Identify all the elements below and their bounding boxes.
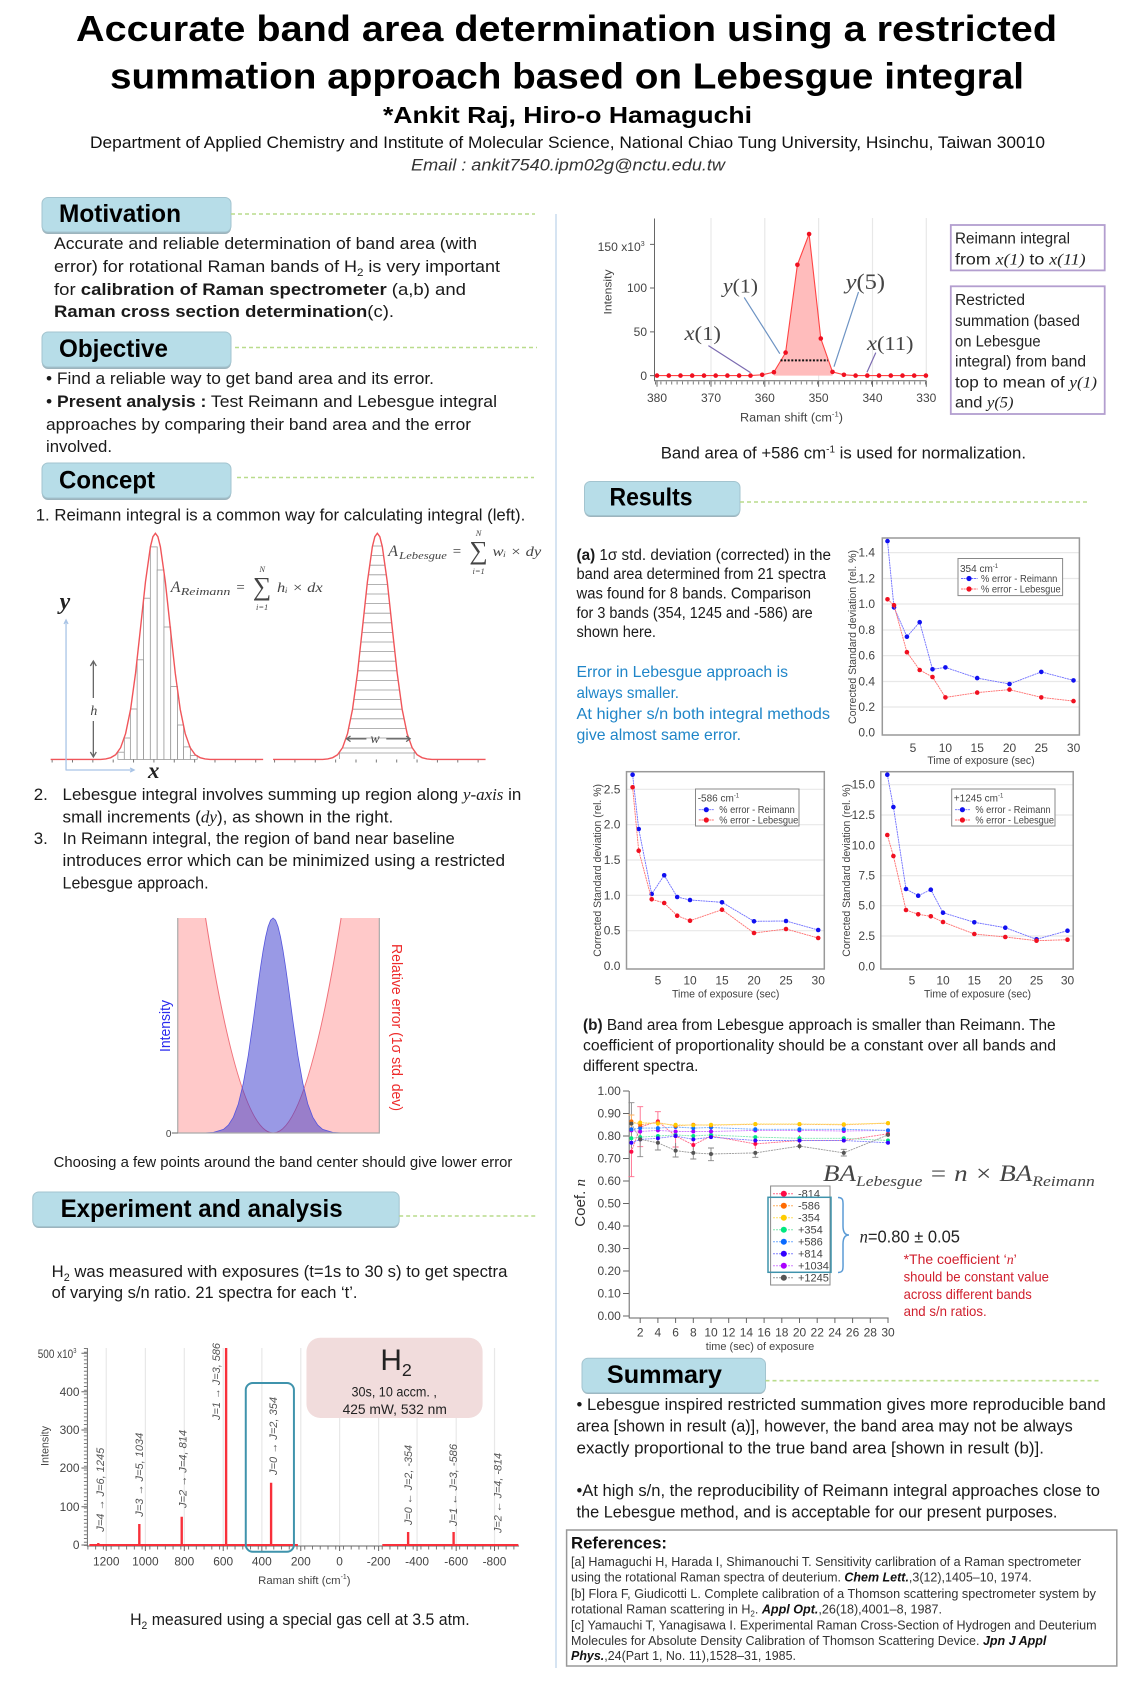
text: motivation: is very important	[363, 257, 500, 276]
band labels: J=1 → J=3, 586	[211, 1342, 223, 1421]
chart: +1245 cm-1 error: 25	[1030, 973, 1043, 987]
note: coefficient: should be constant value	[904, 1269, 1049, 1285]
text: objective: approaches by comparing their band area and the error	[46, 415, 471, 434]
chart: +1245 cm-1 error: Time of exposure (sec)	[924, 989, 1031, 1001]
text: summary: exactly proportional to the true band area [shown in result (b)].	[576, 1438, 1044, 1457]
legend: -814	[798, 1188, 820, 1200]
formula: Lebesgue area: N	[475, 528, 483, 538]
arrow: width w	[347, 732, 410, 747]
chart: coefficient n versus exposure: 0.20	[597, 1264, 621, 1278]
chart: H2 full Raman spectrum: Raman shift (cm	[258, 1575, 341, 1587]
panel: references	[567, 1530, 1117, 1666]
heading: Experiment and analysis	[33, 1192, 537, 1228]
chart: 354 band zoom with integration limits: )	[839, 412, 843, 424]
chart: 354 band zoom with integration limits: 330	[916, 391, 937, 405]
axes: x and y arrows	[57, 589, 159, 783]
chart: 354 cm-1 error: 0.8	[858, 623, 875, 637]
formula: Lebesgue area	[387, 528, 542, 576]
callout: H2 conditions: 425 mW, 532 nm	[343, 1401, 447, 1417]
title: Accurate band area determination using a restricted	[76, 8, 1057, 49]
chart: coefficient n versus exposure: 12	[722, 1326, 736, 1340]
text: result a: shown here.	[576, 624, 656, 641]
chart: 354 band zoom with integration limits: 380	[647, 391, 667, 405]
chart: 354 band zoom with integration limits: 350	[809, 391, 829, 405]
panel: references: Molecules for Absolute Density Calibration of Thomson Scattering Device. Jpn J Appl	[571, 1634, 1047, 1648]
chart: 354 band zoom with integration limits: 360	[755, 391, 775, 405]
chart: coefficient n versus exposure: 0.40	[597, 1219, 621, 1233]
legend: -586 cm	[698, 794, 734, 805]
formula: Lebesgue area: A	[387, 543, 398, 560]
text: concept items 2 and 3	[34, 785, 521, 892]
chart: intensity versus relative error: Intensity	[157, 1000, 174, 1052]
formula: BA relation: Reimann	[1031, 1174, 1095, 1190]
text: summary: area [shown in result (a)], however, the band area may not be always	[576, 1417, 1073, 1436]
formula: Reimann area: A	[170, 579, 181, 596]
chart: 354 band zoom with integration limits: 50	[634, 325, 647, 339]
callout: Reimann integral limits: from x(1) to x(11)	[955, 251, 1086, 268]
axes: x and y arrows: y	[57, 589, 71, 615]
heading: Motivation: Motivation	[59, 200, 181, 228]
text: result b: (b) Band area from Lebesgue approach is smaller than Reimann. The	[583, 1017, 1056, 1034]
formula: Reimann area: ∑	[253, 572, 271, 601]
chart: -586 cm-1 error: 2.0	[604, 818, 621, 832]
band labels	[95, 1342, 504, 1534]
text: summary	[576, 1395, 1106, 1522]
chart: 354 cm-1 error: 1.4	[858, 546, 875, 560]
chart: -586 cm-1 error: 10	[683, 973, 697, 987]
text: result a highlight: give almost same error.	[576, 727, 741, 744]
text: result b: different spectra.	[583, 1058, 698, 1075]
chart: coefficient n versus exposure: 28	[864, 1326, 877, 1340]
text: result a highlight: always smaller.	[576, 685, 679, 702]
chart: coefficient n versus exposure: 1.00	[597, 1084, 621, 1098]
chart: +1245 cm-1 error	[841, 772, 1074, 1001]
legend: -1	[993, 564, 999, 570]
text: experiment: H	[52, 1262, 64, 1281]
text: result a highlight: At higher s/n both integral methods	[576, 706, 830, 723]
band labels: J=0 → J=2, 354	[268, 1397, 280, 1476]
chart: H2 full Raman spectrum: 200	[60, 1461, 80, 1475]
heading: Results	[584, 482, 1090, 517]
note: coefficient: *The coefficient ‘n’	[904, 1251, 1017, 1268]
text: motivation: Raman cross section determination (c).	[54, 302, 394, 321]
chart: -586 cm-1 error: 1.5	[604, 853, 621, 867]
chart: H2 full Raman spectrum: 1200	[93, 1555, 120, 1569]
chart: coefficient n versus exposure: 8	[690, 1326, 697, 1340]
chart: H2 full Raman spectrum: 100	[60, 1500, 80, 1514]
chart: coefficient n versus exposure: 4	[655, 1326, 662, 1340]
affiliation: Department of Applied Chemistry and Institute of Molecular Science, National Chiao Tung University, Hsinchu, Taiwan 30010	[90, 133, 1045, 152]
legend: 354 cm	[960, 564, 993, 575]
legend: -1	[998, 794, 1004, 800]
chart: -586 cm-1 error: 20	[747, 973, 761, 987]
callout: Reimann integral limits	[951, 225, 1105, 270]
chart: +1245 cm-1 error: 10	[936, 973, 950, 987]
chart: coefficient n versus exposure: 20	[793, 1326, 806, 1340]
chart: 354 band zoom with integration limits: Raman shift (cm	[740, 412, 824, 424]
text: normalization note: is used for normalization.	[835, 444, 1026, 462]
text: concept items 2 and 3: 3.	[34, 829, 48, 848]
highlight box: legend selection	[768, 1197, 831, 1272]
chart: -586 cm-1 error: 1.0	[604, 888, 621, 902]
chart: -586 cm-1 error: Corrected Standard deviation (rel. %)	[592, 784, 604, 957]
legend: % error - Lebesgue	[981, 584, 1061, 596]
callout: restricted summation	[951, 286, 1105, 414]
chart: coefficient n versus exposure: 0.30	[597, 1242, 621, 1256]
text: motivation	[54, 234, 500, 321]
chart: +1245 cm-1 error: 5.0	[858, 899, 875, 913]
formula: BA relation: BA	[823, 1161, 851, 1186]
chart: 354 cm-1 error: 10	[939, 741, 952, 755]
chart: 354 cm-1 error: 30	[1067, 741, 1081, 755]
heading: Results: Results	[610, 484, 692, 512]
chart: intensity versus relative error: 0	[166, 1129, 172, 1140]
arrow: height h	[90, 661, 97, 757]
callout: restricted summation: top to mean of y(1)	[955, 374, 1097, 391]
chart: 354 band zoom with integration limits	[598, 218, 937, 424]
formula: BA relation: Lebesgue	[855, 1174, 923, 1190]
chart: H2 full Raman spectrum: -800	[483, 1555, 507, 1569]
annotation: y(1), y(5), x(1), x(11): x(11)	[866, 333, 914, 355]
title	[76, 8, 1057, 96]
legend: % error - Lebesgue	[719, 816, 799, 826]
chart: coefficient n versus exposure	[572, 1084, 1095, 1353]
panel: references: [a] Hamaguchi H, Harada I, Shimanouchi T. Sensitivity carlibration of a Raman spectrometer	[571, 1555, 1081, 1569]
text: result a: band area determined from 21 spectra	[576, 566, 826, 583]
heading: Experiment and analysis: Experiment and analysis	[61, 1195, 343, 1223]
formula: Lebesgue area: Lebesgue	[398, 551, 448, 562]
panel: references: Appl Opt.,26(18),4001–8, 1987.	[762, 1602, 941, 1616]
text: motivation: 2	[357, 267, 363, 279]
chart: H2 full Raman spectrum: 500 x10	[38, 1347, 80, 1361]
panel: references: Phys.,24(Part 1, No. 11),1528–31, 1985.	[571, 1649, 796, 1663]
chart: H2 full Raman spectrum: -600	[444, 1555, 468, 1569]
panel: references: [b] Flora F, Giudicotti L. Complete calibration of a Thomson scattering spectrometer system by	[571, 1587, 1097, 1601]
text: normalization note: -1	[826, 444, 835, 456]
chart: -586 cm-1 error: 0.0	[604, 959, 621, 973]
callout: restricted summation: integral) from band	[955, 354, 1086, 371]
annotation: y(1), y(5), x(1), x(11): y(5)	[843, 269, 885, 294]
chart: -586 cm-1 error: Time of exposure (sec)	[672, 989, 779, 1001]
chart: 354 band zoom with integration limits: 3	[641, 241, 645, 248]
chart: H2 full Raman spectrum: 1000	[132, 1555, 159, 1569]
chart: coefficient n versus exposure: 2	[637, 1326, 644, 1340]
formula: Reimann area: Reimann	[179, 587, 230, 598]
text: summary: the Lebesgue method, and is acceptable for our present purposes.	[576, 1503, 1057, 1522]
chart: H2 full Raman spectrum: 0	[73, 1538, 80, 1552]
chart: coefficient n versus exposure: 0.80	[597, 1129, 621, 1143]
chart: -586 cm-1 error: 5	[655, 973, 662, 987]
authors: *Ankit Raj, Hiro-o Hamaguchi	[383, 102, 752, 128]
note: coefficient: and s/n ratios.	[904, 1303, 987, 1319]
legend	[696, 789, 799, 826]
chart: +1245 cm-1 error: 12.5	[852, 808, 875, 822]
legend: % error - Reimann	[981, 574, 1057, 585]
chart: Lebesgue gaussian with horizontal slices	[273, 528, 542, 761]
chart: +1245 cm-1 error: 10.0	[852, 838, 875, 852]
text: concept items 2 and 3: introduces error which can be minimized using a restricted	[63, 851, 505, 870]
text: concept item 1: 1. Reimann integral is a common way for calculating integral (left).	[36, 505, 525, 525]
formula: Reimann area: i=1	[256, 602, 268, 612]
annotation: y(1), y(5), x(1), x(11): x(1)	[683, 323, 721, 345]
chart: 354 cm-1 error: 15	[971, 741, 984, 755]
chart: coefficient n versus exposure: 0.00	[597, 1309, 621, 1323]
chart: +1245 cm-1 error: 7.5	[858, 869, 875, 883]
chart: 354 cm-1 error: 1.2	[858, 572, 875, 586]
heading: Concept: Concept	[59, 466, 156, 494]
formula: Lebesgue area: i=1	[472, 566, 485, 576]
note: coefficient	[904, 1251, 1049, 1319]
title: summation approach based on Lebesgue integral	[110, 56, 1024, 96]
chart: H2 full Raman spectrum	[38, 1338, 519, 1587]
chart: 354 cm-1 error: 0.4	[858, 674, 875, 688]
panel: references: rotational Raman scattering in H	[571, 1602, 750, 1616]
legend: % error - Reimann	[719, 805, 795, 816]
text: result a highlight	[576, 664, 830, 744]
error bars	[628, 1103, 847, 1177]
chart: intensity versus relative error	[157, 918, 405, 1140]
text: result a: for 3 bands (354, 1245 and -586) are	[576, 605, 813, 622]
legend: % error - Reimann	[975, 805, 1051, 816]
chart: +1245 cm-1 error: 15.0	[852, 778, 875, 792]
axes: x and y arrows: x	[147, 758, 159, 783]
text: objective: • Present analysis : Test Reimann and Lebesgue integral	[46, 392, 497, 411]
chart: -586 cm-1 error: 0.5	[604, 924, 621, 938]
chart: H2 full Raman spectrum: 300	[60, 1423, 80, 1437]
email: Email : ankit7540.ipm02g@nctu.edu.tw	[411, 156, 727, 174]
formula: Reimann area: N	[258, 564, 266, 574]
spectrum trace	[89, 1348, 518, 1545]
text: objective	[46, 369, 497, 456]
chart: +1245 cm-1 error: 2.5	[858, 929, 875, 943]
chart: coefficient n versus exposure: 22	[811, 1326, 824, 1340]
chart: coefficient n versus exposure: 6	[672, 1326, 679, 1340]
chart: -586 cm-1 error	[592, 772, 825, 1001]
chart: -586 cm-1 error: 2.5	[604, 782, 621, 796]
legend: -1	[734, 794, 740, 800]
chart: H2 full Raman spectrum: 800	[174, 1555, 195, 1569]
panel: references: References:	[571, 1533, 667, 1552]
chart: H2 full Raman spectrum: 200	[291, 1555, 311, 1569]
formula: Lebesgue area: wᵢ × dy	[493, 545, 542, 560]
annotation: y(1), y(5), x(1), x(11): y(1)	[721, 276, 758, 298]
chart: coefficient n versus exposure: 30	[881, 1326, 895, 1340]
text: result a highlight: Error in Lebesgue approach is	[576, 664, 788, 681]
chart: 354 band zoom with integration limits: 340	[862, 391, 883, 405]
text: result b: coefficient of proportionality should be a constant over all bands and	[583, 1038, 1056, 1055]
formula: Reimann area	[170, 564, 324, 612]
chart: coefficient n versus exposure: 0.70	[597, 1152, 621, 1166]
annotation: y(1), y(5), x(1), x(11)	[683, 269, 914, 373]
text: summary: • Lebesgue inspired restricted summation gives more reproducible band	[576, 1395, 1106, 1414]
legend: +354	[798, 1224, 823, 1236]
chart: +1245 cm-1 error: Corrected Standard deviation (rel. %)	[841, 784, 853, 957]
brace	[838, 1198, 849, 1272]
panel: references: using the rotational Raman spectra of deuterium. Chem Lett.,3(12),1405–10, 1974.	[571, 1570, 1032, 1584]
text: normalization note: Band area of +586 cm	[661, 444, 828, 462]
legend	[958, 558, 1063, 596]
text: experiment: of varying s/n ratio. 21 spectra for each ‘t’.	[52, 1283, 357, 1302]
text: concept items 2 and 3: Lebesgue integral involves summing up region along y-axis in	[63, 785, 521, 804]
text: objective: involved.	[46, 437, 112, 456]
chart: H2 full Raman spectrum: 400	[252, 1555, 272, 1569]
caption: band center: Choosing a few points around the band center should give lower error	[54, 1154, 512, 1171]
chart: coefficient n versus exposure: 0.50	[597, 1196, 621, 1210]
chart: H2 full Raman spectrum: 3	[73, 1348, 77, 1355]
chart: coefficient n versus exposure: 18	[775, 1326, 789, 1340]
formula: Reimann area: =	[236, 580, 245, 596]
callout: Reimann integral limits: Reimann integral	[955, 231, 1070, 248]
text: summary: •At high s/n, the reproducibility of Reimann integral approaches close to	[576, 1481, 1100, 1500]
legend: -354	[798, 1212, 820, 1224]
chart: +1245 cm-1 error: 15	[968, 973, 981, 987]
caption: gas cell: measured using a special gas cell at 3.5 atm.	[147, 1610, 470, 1629]
legend: +1034	[798, 1260, 829, 1272]
text: experiment	[52, 1262, 508, 1302]
callout: restricted summation: summation (based	[955, 313, 1080, 330]
chart: 354 cm-1 error: 0.2	[858, 700, 875, 714]
formula: BA relation: = n × BA	[922, 1161, 1033, 1186]
text: concept items 2 and 3: In Reimann integral, the region of band near baseline	[63, 829, 455, 848]
chart: coefficient n versus exposure: 0.60	[597, 1174, 621, 1188]
chart: 354 cm-1 error	[847, 538, 1081, 767]
chart: H2 full Raman spectrum: -400	[405, 1555, 429, 1569]
chart: coefficient n versus exposure: 26	[846, 1326, 860, 1340]
heading: Objective	[42, 332, 537, 369]
highlight box: 354 band	[246, 1383, 294, 1552]
chart: H2 full Raman spectrum: Intensity	[40, 1425, 52, 1466]
arrow: height h: h	[90, 704, 97, 719]
band labels: J=1 ← J=3, -586	[448, 1443, 460, 1527]
chart: 354 band zoom with integration limits: 100	[627, 281, 647, 295]
chart: H2 full Raman spectrum: 400	[60, 1385, 80, 1399]
panel: references: .	[755, 1602, 762, 1616]
legend	[952, 789, 1055, 826]
chart: +1245 cm-1 error: 5	[909, 973, 916, 987]
panel: references: 2	[750, 1609, 755, 1618]
band labels: J=3 → J=5, 1034	[134, 1433, 146, 1518]
chart: 354 cm-1 error: 1.0	[858, 597, 875, 611]
chart: 354 cm-1 error: Corrected Standard deviation (rel. %)	[847, 550, 859, 724]
chart: -586 cm-1 error: 15	[715, 973, 729, 987]
text: motivation: for calibration of Raman spectrometer (a,b) and	[54, 280, 466, 299]
legend: -586	[798, 1200, 820, 1212]
heading: Summary	[582, 1358, 1099, 1394]
text: experiment: was measured with exposures (t=1s to 30 s) to get spectra	[70, 1262, 508, 1281]
chart: coefficient n versus exposure: 0.10	[597, 1286, 621, 1300]
callout: H2 conditions: 30s, 10 accm. ,	[352, 1384, 437, 1400]
text: objective: • Find a reliable way to get band area and its error.	[46, 369, 434, 388]
chart: 354 band zoom with integration limits: 150 x10	[598, 240, 640, 254]
heading: Summary: Summary	[607, 1361, 722, 1389]
formula: Lebesgue area: =	[453, 544, 461, 560]
callout: restricted summation: on Lebesgue	[955, 333, 1041, 350]
band labels: J=2 → J=4, 814	[178, 1430, 190, 1509]
text: concept items 2 and 3: small increments (dy), as shown in the right.	[63, 807, 393, 826]
chart: H2 full Raman spectrum: 0	[336, 1555, 343, 1569]
chart: coefficient n versus exposure: 24	[828, 1326, 842, 1340]
callout: H2 conditions: H	[380, 1344, 402, 1377]
chart: H2 full Raman spectrum: -200	[367, 1555, 391, 1569]
formula: Lebesgue area: ∑	[469, 536, 488, 565]
chart: +1245 cm-1 error: 20	[999, 973, 1012, 987]
text: motivation: error) for rotational Raman bands of H	[54, 257, 341, 276]
callout: H2 conditions	[306, 1338, 483, 1418]
note: coefficient: across different bands	[904, 1286, 1032, 1302]
band labels: J=0 ← J=2, -354	[403, 1445, 415, 1526]
chart: 354 band zoom with integration limits: Intensity	[602, 269, 614, 314]
chart: coefficient n versus exposure: 16	[757, 1326, 771, 1340]
chart: coefficient n versus exposure: time (sec) of exposure	[706, 1341, 814, 1353]
callout: restricted summation: Restricted	[955, 292, 1025, 309]
chart: H2 full Raman spectrum: 600	[213, 1555, 234, 1569]
chart: coefficient n versus exposure: 14	[740, 1326, 753, 1340]
chart: 354 cm-1 error: 0.6	[858, 649, 875, 663]
text: experiment: 2	[64, 1272, 70, 1284]
legend: % error - Lebesgue	[975, 816, 1054, 826]
chart: +1245 cm-1 error: 30	[1061, 973, 1074, 987]
chart: 354 cm-1 error: 20	[1003, 741, 1016, 755]
text: concept items 2 and 3: Lebesgue approach.	[63, 873, 209, 892]
legend	[771, 1186, 830, 1285]
chart: 354 cm-1 error: 25	[1035, 741, 1048, 755]
heading: Concept	[42, 463, 534, 500]
formula: Reimann area: hᵢ × dx	[277, 581, 324, 596]
chart: intensity versus relative error: Relative error (1σ std. dev)	[388, 944, 405, 1111]
chart: -586 cm-1 error: 25	[779, 973, 793, 987]
arrow: width w: w	[370, 732, 380, 747]
chart: coefficient n versus exposure: Coef. n	[572, 1179, 589, 1227]
legend: +586	[798, 1236, 823, 1248]
text: concept items 2 and 3: 2.	[34, 785, 48, 804]
band labels: J=4 → J=6, 1245	[95, 1447, 107, 1533]
caption: gas cell: H	[130, 1610, 142, 1629]
chart: -586 cm-1 error: 30	[812, 973, 825, 987]
panel: references: [c] Yamauchi T, Yanagisawa I. Experimental Raman Cross-Section of Hydrogen and Deuterium	[571, 1618, 1097, 1632]
chart: 354 cm-1 error: Time of exposure (sec)	[927, 755, 1035, 767]
text: result a	[576, 547, 831, 641]
chart: coefficient n versus exposure: 0.90	[597, 1106, 621, 1120]
heading: Objective: Objective	[59, 335, 168, 363]
band labels: J=2 ← J=4, -814	[492, 1453, 504, 1534]
chart: +1245 cm-1 error: 0.0	[858, 959, 875, 973]
callout: H2 conditions: 2	[402, 1360, 412, 1380]
callout: restricted summation: and y(5)	[955, 394, 1014, 411]
legend: +1245 cm	[954, 794, 998, 805]
chart: coefficient n versus exposure: 10	[704, 1326, 718, 1340]
legend: +814	[798, 1248, 823, 1260]
chart: H2 full Raman spectrum: -1	[341, 1574, 347, 1581]
text: result a: was found for 8 bands. Comparison	[576, 586, 811, 602]
chart: 354 band zoom with integration limits: -1	[832, 412, 839, 418]
chart: 354 cm-1 error: 0.0	[858, 726, 875, 740]
chart: 354 band zoom with integration limits: 0	[640, 369, 647, 383]
text: result b	[583, 1017, 1056, 1075]
text: motivation: Accurate and reliable determination of band area (with	[54, 234, 477, 253]
value: n: n=0.80 ± 0.05	[860, 1227, 960, 1247]
legend: +1245	[798, 1272, 829, 1284]
text: result a: (a) 1σ std. deviation (corrected) in the	[576, 547, 831, 564]
chart: 354 band zoom with integration limits: 370	[701, 391, 721, 405]
chart: 354 cm-1 error: 5	[910, 741, 917, 755]
chart: H2 full Raman spectrum: )	[347, 1575, 351, 1587]
heading: Motivation	[42, 198, 535, 234]
chart: Reimann gaussian with vertical bars	[51, 533, 324, 783]
caption: gas cell: 2	[142, 1620, 147, 1632]
